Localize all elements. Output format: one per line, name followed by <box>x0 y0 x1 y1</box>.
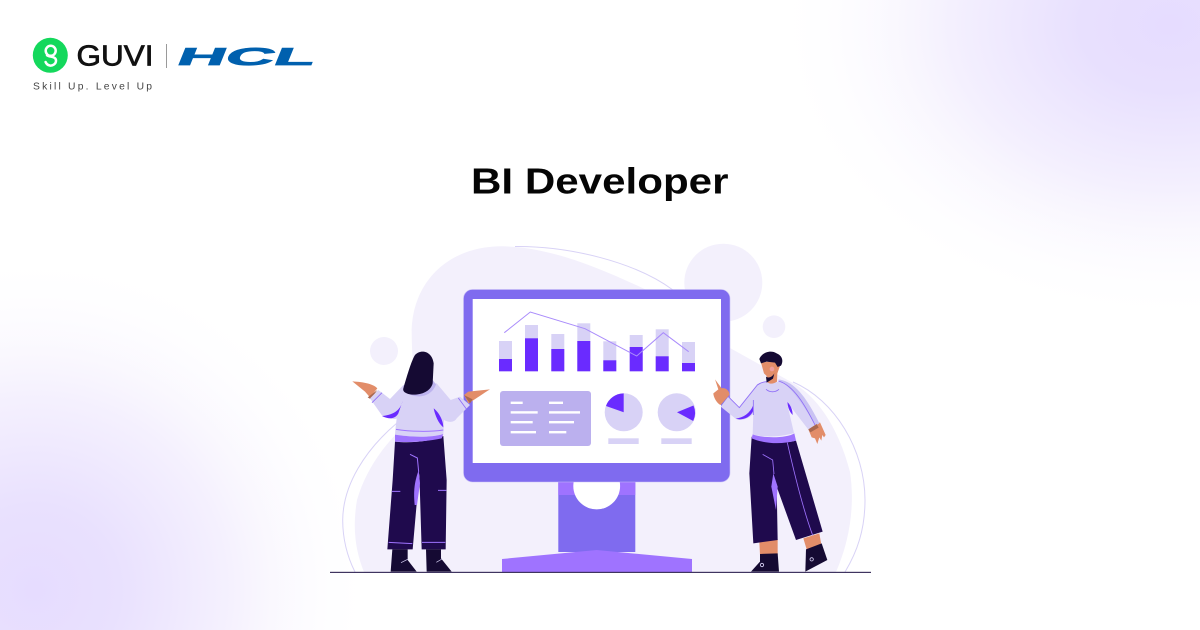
shoes <box>751 553 779 572</box>
sweater <box>370 383 470 437</box>
pants <box>387 436 447 549</box>
hands <box>352 381 377 397</box>
sweater <box>778 379 819 429</box>
head <box>761 361 780 384</box>
bar chart <box>499 312 695 371</box>
data table card <box>500 391 591 446</box>
figure: woman <box>352 352 490 572</box>
figure: man <box>713 352 827 572</box>
screen <box>473 299 721 463</box>
other hand <box>808 422 826 444</box>
thin outlines <box>343 246 865 572</box>
monitor <box>464 290 730 482</box>
tagline: Skill Up. Level Up <box>33 81 152 92</box>
pants <box>749 437 823 543</box>
logo: GUVI HCL <box>33 38 321 92</box>
monitor stand <box>502 463 692 572</box>
decorative circles <box>370 244 785 365</box>
legs <box>759 539 778 555</box>
logo divider <box>166 44 167 68</box>
pie chart 2 <box>658 393 696 444</box>
stand base <box>502 550 692 572</box>
line chart <box>504 312 689 356</box>
hair <box>403 380 436 396</box>
illustration: background shapes <box>343 244 865 572</box>
shoes <box>391 549 417 572</box>
ground line <box>330 572 871 573</box>
HCL wordmark: HCL <box>173 43 321 70</box>
title: BI Developer <box>471 160 728 202</box>
icon: GUVI green circle <box>33 38 68 73</box>
pie chart 1 <box>605 393 643 444</box>
GUVI wordmark: GUVI <box>76 41 154 73</box>
background blob <box>355 246 852 572</box>
pointing hand <box>713 379 729 405</box>
